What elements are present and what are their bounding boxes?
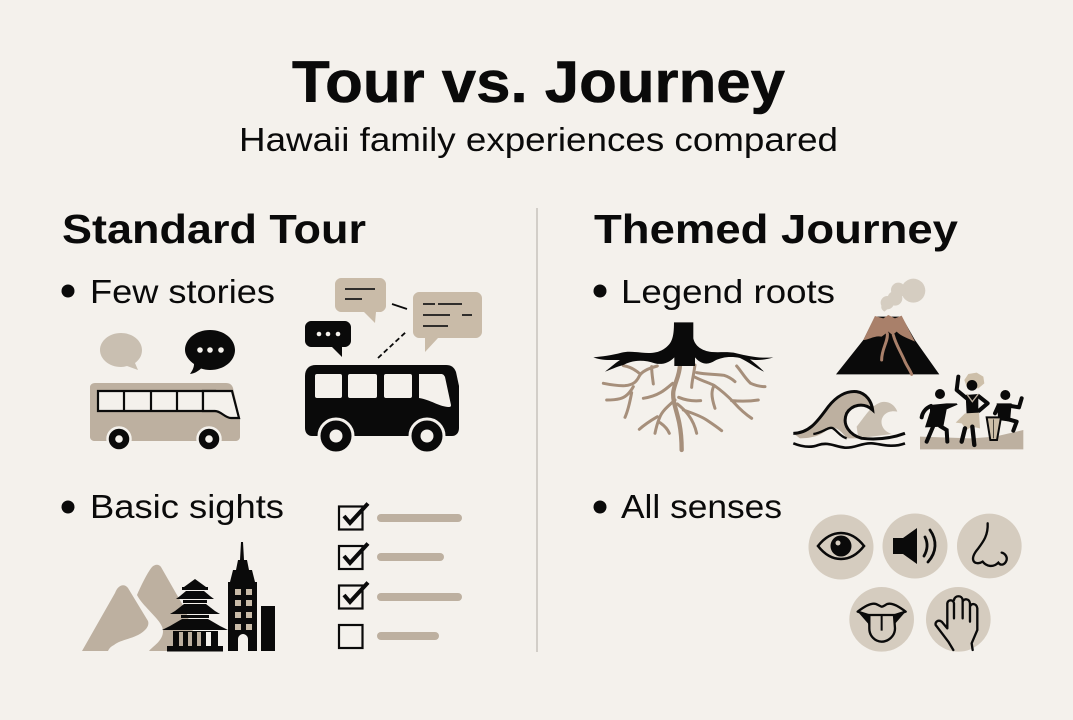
roots below ground bbox=[603, 365, 765, 450]
icon: nose circle bbox=[957, 514, 1022, 578]
panel: themed journey bbox=[593, 206, 1023, 652]
bullet: all senses: All senses bbox=[621, 488, 782, 525]
icon: eye circle bbox=[808, 514, 874, 580]
icon: tan speech bubble bbox=[100, 333, 142, 370]
bullet: few stories: Few stories bbox=[90, 273, 275, 310]
icon: speaker circle bbox=[882, 514, 948, 578]
icon: checklist bbox=[339, 504, 458, 648]
heading: standard tour: Standard Tour bbox=[62, 206, 366, 252]
icon: ocean waves bbox=[793, 392, 905, 448]
bullet: basic sights: Basic sights bbox=[90, 488, 284, 525]
icon: hula dancers bbox=[920, 373, 1023, 449]
icon: small tan bus bbox=[90, 383, 240, 450]
icon: tan chat bubble small bbox=[335, 278, 386, 323]
subtitle: Hawaii family experiences compared bbox=[239, 121, 838, 158]
icon: tree roots bbox=[593, 322, 773, 450]
heading: themed journey: Themed Journey bbox=[594, 206, 958, 252]
bullet: legend roots: Legend roots bbox=[621, 273, 835, 310]
icon: tan chat bubble large bbox=[413, 292, 482, 352]
panel: standard tour bbox=[62, 206, 482, 652]
dancer left bbox=[922, 389, 958, 442]
trunk and upper roots bbox=[593, 322, 773, 372]
icon: hand circle bbox=[926, 587, 991, 652]
icon: black speech bubble with dots bbox=[185, 330, 235, 374]
skyscraper bbox=[228, 542, 275, 651]
mountains bbox=[82, 565, 200, 651]
dashed connectors bbox=[378, 304, 407, 358]
icon: tongue circle bbox=[849, 587, 914, 652]
icon: black chat bubble bbox=[305, 321, 351, 357]
title: Tour vs. Journey bbox=[292, 50, 785, 115]
pagoda bbox=[162, 579, 228, 652]
dancer middle bbox=[956, 373, 988, 445]
icon: volcano bbox=[836, 279, 939, 374]
dancer right with drum bbox=[987, 390, 1022, 440]
icon: large black bus bbox=[305, 365, 459, 453]
icon: mountains, pagoda and skyscraper bbox=[82, 542, 275, 652]
